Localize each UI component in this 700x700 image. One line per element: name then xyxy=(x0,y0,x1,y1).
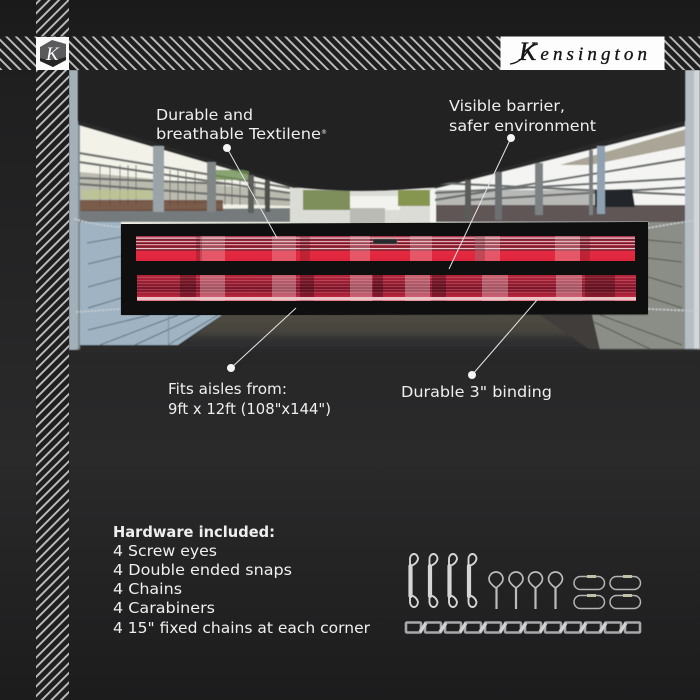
label: visible barrier: safer environment xyxy=(449,117,596,135)
hardware list: 4 Screw eyes xyxy=(113,542,217,560)
label: durable and breathable Textilene: Durable and xyxy=(156,106,253,124)
label: visible barrier xyxy=(449,97,596,135)
Kensington logo box: Kensington xyxy=(518,37,647,66)
leader: visible barrier xyxy=(449,134,515,269)
vertical hatched band xyxy=(36,0,69,700)
label: durable and breathable Textilene: breathable Textilene xyxy=(156,125,321,143)
left stall mesh and greenery xyxy=(100,165,265,205)
label: fits aisles xyxy=(168,380,331,418)
hardware list: Hardware included: xyxy=(113,523,275,541)
shield logo tile xyxy=(36,37,69,70)
floor xyxy=(175,315,595,350)
label: durable and breathable Textilene xyxy=(156,106,327,143)
hardware list xyxy=(113,523,371,637)
hardware list: 4 15" fixed chains at each corner xyxy=(113,619,371,637)
leader: binding xyxy=(468,300,537,379)
upper red panel xyxy=(136,236,635,261)
bottom photo fade xyxy=(78,349,700,353)
barn aisle photo xyxy=(69,70,700,350)
label: fits aisles: 9ft x 12ft (108"x144") xyxy=(168,400,331,418)
shield logo tile: K xyxy=(45,44,60,65)
hardware list: 4 Double ended snaps xyxy=(113,561,292,579)
left stall rails xyxy=(79,153,290,200)
hardware list: 4 Carabiners xyxy=(113,599,215,617)
aisle chains xyxy=(74,219,697,312)
wall posts xyxy=(69,70,78,350)
label: durable and breathable Textilene: ® xyxy=(321,129,327,136)
right stalls background xyxy=(430,125,690,225)
leader: fits aisles xyxy=(227,308,296,372)
label: durable binding: Durable 3" binding xyxy=(401,383,552,401)
banner tag xyxy=(373,239,397,244)
left stall posts xyxy=(153,146,164,212)
left stall mesh shade xyxy=(80,172,290,206)
icons: carabiners xyxy=(574,576,640,608)
left stall lower wall xyxy=(78,208,300,222)
icon: chain xyxy=(406,622,640,632)
lower red panel xyxy=(137,275,636,301)
Kensington logo box xyxy=(500,36,664,70)
leader: Textilene xyxy=(223,144,277,238)
icons: screw eyes xyxy=(489,572,562,609)
label: visible barrier: Visible barrier, xyxy=(449,97,565,115)
left wall xyxy=(78,222,222,345)
left stalls background xyxy=(78,125,300,225)
dark ceiling overlay xyxy=(78,70,685,191)
black binding xyxy=(121,222,648,315)
stall guard banner xyxy=(121,222,648,315)
right wall xyxy=(590,222,685,350)
far background xyxy=(290,188,435,224)
hardware list: 4 Chains xyxy=(113,580,182,598)
right stall rails xyxy=(435,158,690,200)
label: fits aisles: Fits aisles from: xyxy=(168,380,287,398)
icons: double ended snaps xyxy=(410,554,476,607)
horizontal hatched band xyxy=(0,36,700,70)
